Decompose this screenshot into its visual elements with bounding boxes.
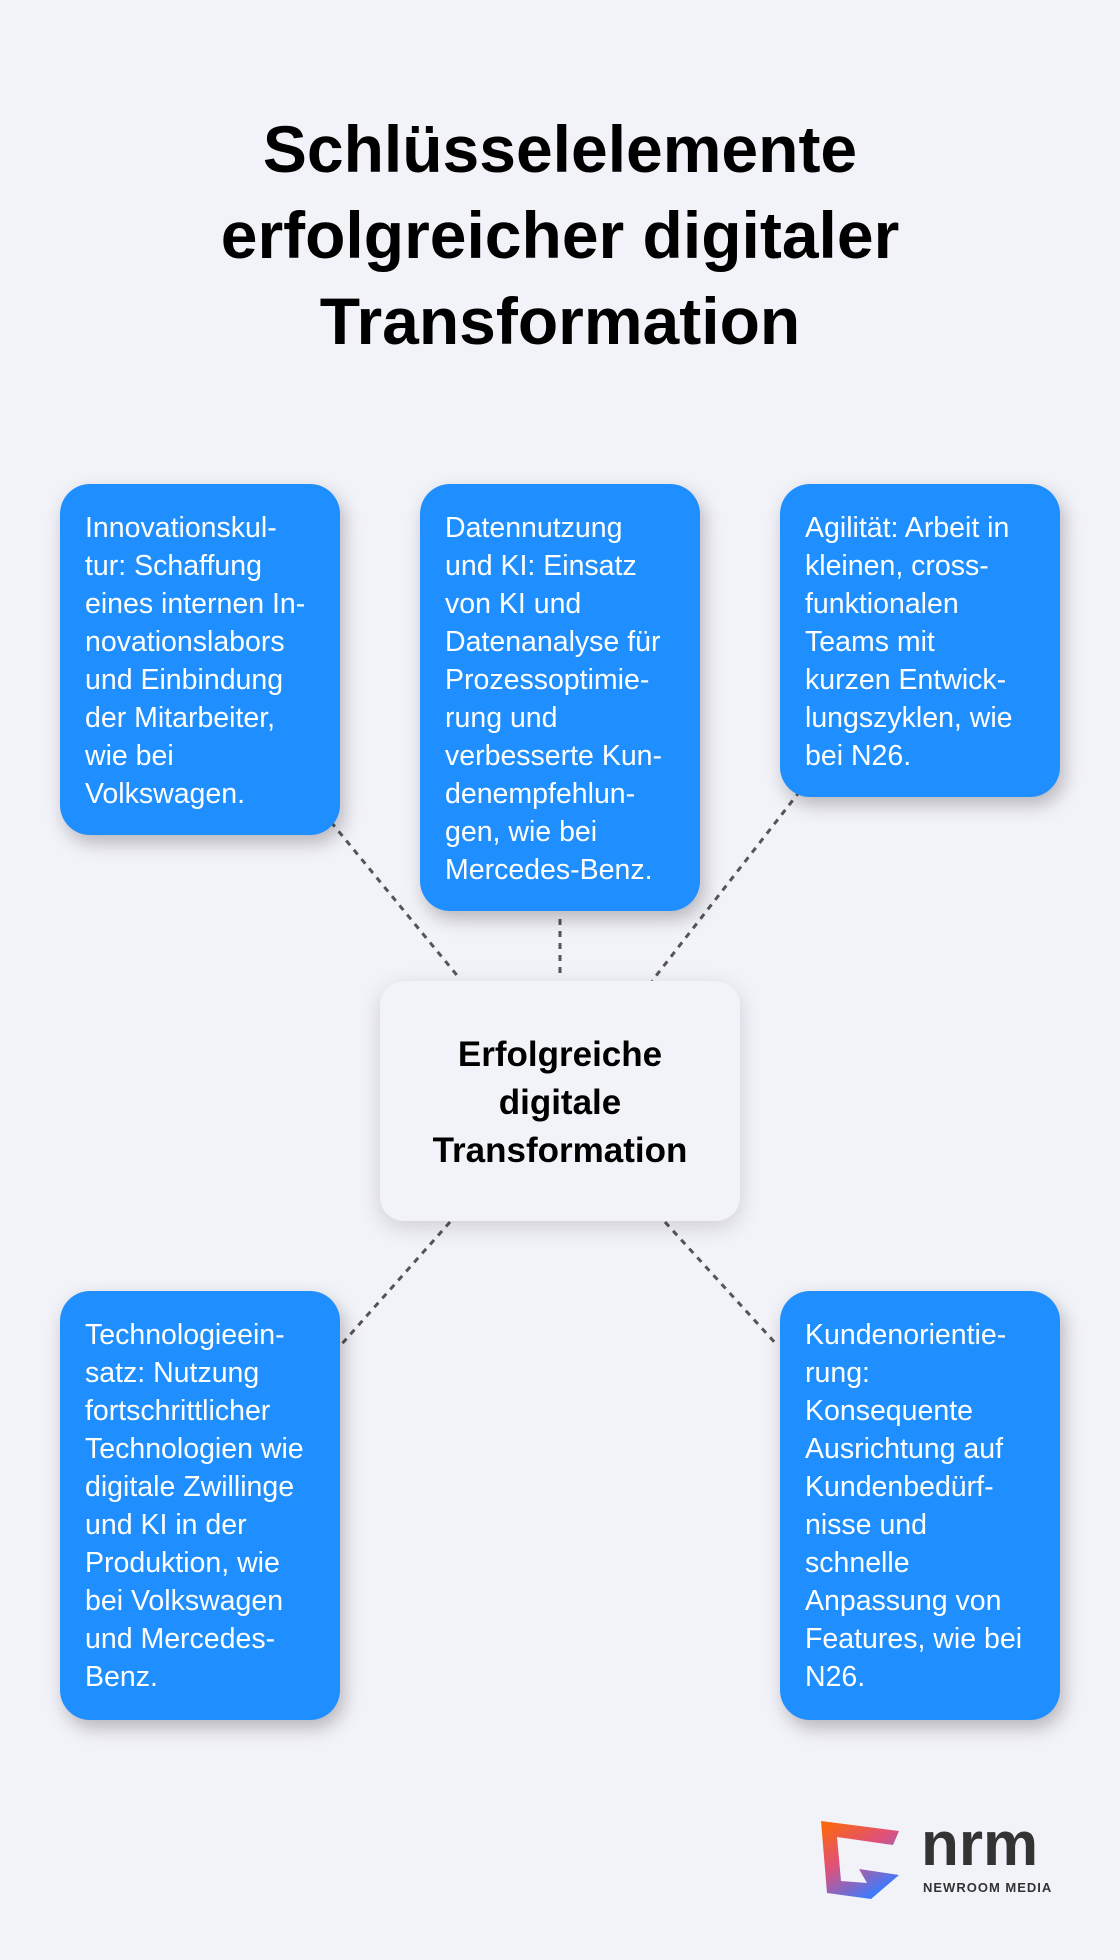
box: Agilität: funktionalen	[805, 588, 959, 620]
box: Technologieeinsatz: und KI in der	[85, 1509, 247, 1541]
box: Datennutzung und KI: von KI und	[445, 588, 581, 620]
box: Kundenorientierung: Konsequente	[805, 1395, 973, 1427]
center box: Erfolgreiche	[458, 1035, 662, 1074]
box: Technologieeinsatz: bei Volkswagen	[85, 1585, 283, 1617]
box: Datennutzung und KI: Datenanalyse für	[445, 626, 660, 658]
box: Kundenorientierung: nisse und	[805, 1509, 927, 1541]
box: Datennutzung und KI: Mercedes-Benz.	[445, 854, 653, 886]
box: Kundenorientierung: schnelle	[805, 1547, 910, 1579]
box: Agilität	[780, 484, 1060, 797]
box: Innovationskultur: und Einbindung	[85, 664, 283, 696]
title: Transformation	[320, 284, 800, 358]
title: Schlüsselelemente	[263, 112, 857, 186]
box: Datennutzung und KI: Prozessoptimie-	[445, 664, 649, 696]
box: Technologieeinsatz: Benz.	[85, 1661, 158, 1693]
box: Kundenorientierung: rung:	[805, 1357, 870, 1389]
box: Datennutzung und KI: denempfehlun-	[445, 778, 635, 810]
box: Agilität: kurzen Entwick-	[805, 664, 1006, 696]
title	[221, 112, 899, 358]
title: erfolgreicher digitaler	[221, 198, 899, 272]
box: Kundenorientierung: Kundenbedürf-	[805, 1471, 994, 1503]
box: Datennutzung und KI: rung und	[445, 702, 558, 734]
box: Innovationskultur: Innovationskul-	[85, 512, 277, 544]
logo: NEWROOM MEDIA	[923, 1880, 1052, 1895]
box: Innovationskultur: novationslabors	[85, 626, 285, 658]
box: Kundenorientierung: Kundenorientie-	[805, 1319, 1006, 1351]
box: Agilität: Agilität: Arbeit in	[805, 512, 1009, 544]
box: Kundenorientierung	[780, 1291, 1060, 1720]
box: Datennutzung und KI	[420, 484, 700, 911]
center box: digitale	[499, 1083, 621, 1122]
box: Agilität: Teams mit	[805, 626, 935, 658]
box: Kundenorientierung: Anpassung von	[805, 1585, 1001, 1617]
box: Technologieeinsatz: Produktion, wie	[85, 1547, 280, 1579]
box: Datennutzung und KI: Datennutzung	[445, 512, 622, 544]
center box	[380, 981, 740, 1221]
box: Technologieeinsatz: satz: Nutzung	[85, 1357, 259, 1389]
box: Innovationskultur: tur: Schaffung	[85, 550, 262, 582]
center box: Transformation	[433, 1131, 687, 1170]
box: Agilität: bei N26.	[805, 740, 911, 772]
box: Datennutzung und KI: gen, wie bei	[445, 816, 597, 848]
box: Agilität: lungszyklen, wie	[805, 702, 1013, 734]
box: Innovationskultur: eines internen In-	[85, 588, 305, 620]
logo	[821, 1810, 1052, 1899]
box: Technologieeinsatz: und Mercedes-	[85, 1623, 275, 1655]
box: Technologieeinsatz: fortschrittlicher	[85, 1395, 270, 1427]
box: Technologieeinsatz: Technologieein-	[85, 1319, 285, 1351]
box: Innovationskultur	[60, 484, 340, 835]
box: Datennutzung und KI: verbesserte Kun-	[445, 740, 662, 772]
box: Innovationskultur: wie bei	[85, 740, 174, 772]
box: Kundenorientierung: Ausrichtung auf	[805, 1433, 1003, 1465]
box: Technologieeinsatz: Technologien wie	[85, 1433, 304, 1465]
box: Innovationskultur: der Mitarbeiter,	[85, 702, 275, 734]
box: Technologieeinsatz	[60, 1291, 340, 1720]
box: Innovationskultur: Volkswagen.	[85, 778, 245, 810]
box: Kundenorientierung: N26.	[805, 1661, 865, 1693]
box: Agilität: kleinen, cross-	[805, 550, 989, 582]
box: Datennutzung und KI: und KI: Einsatz	[445, 550, 637, 582]
logo: nrm	[921, 1810, 1038, 1879]
box: Kundenorientierung: Features, wie bei	[805, 1623, 1022, 1655]
box: Technologieeinsatz: digitale Zwillinge	[85, 1471, 294, 1503]
